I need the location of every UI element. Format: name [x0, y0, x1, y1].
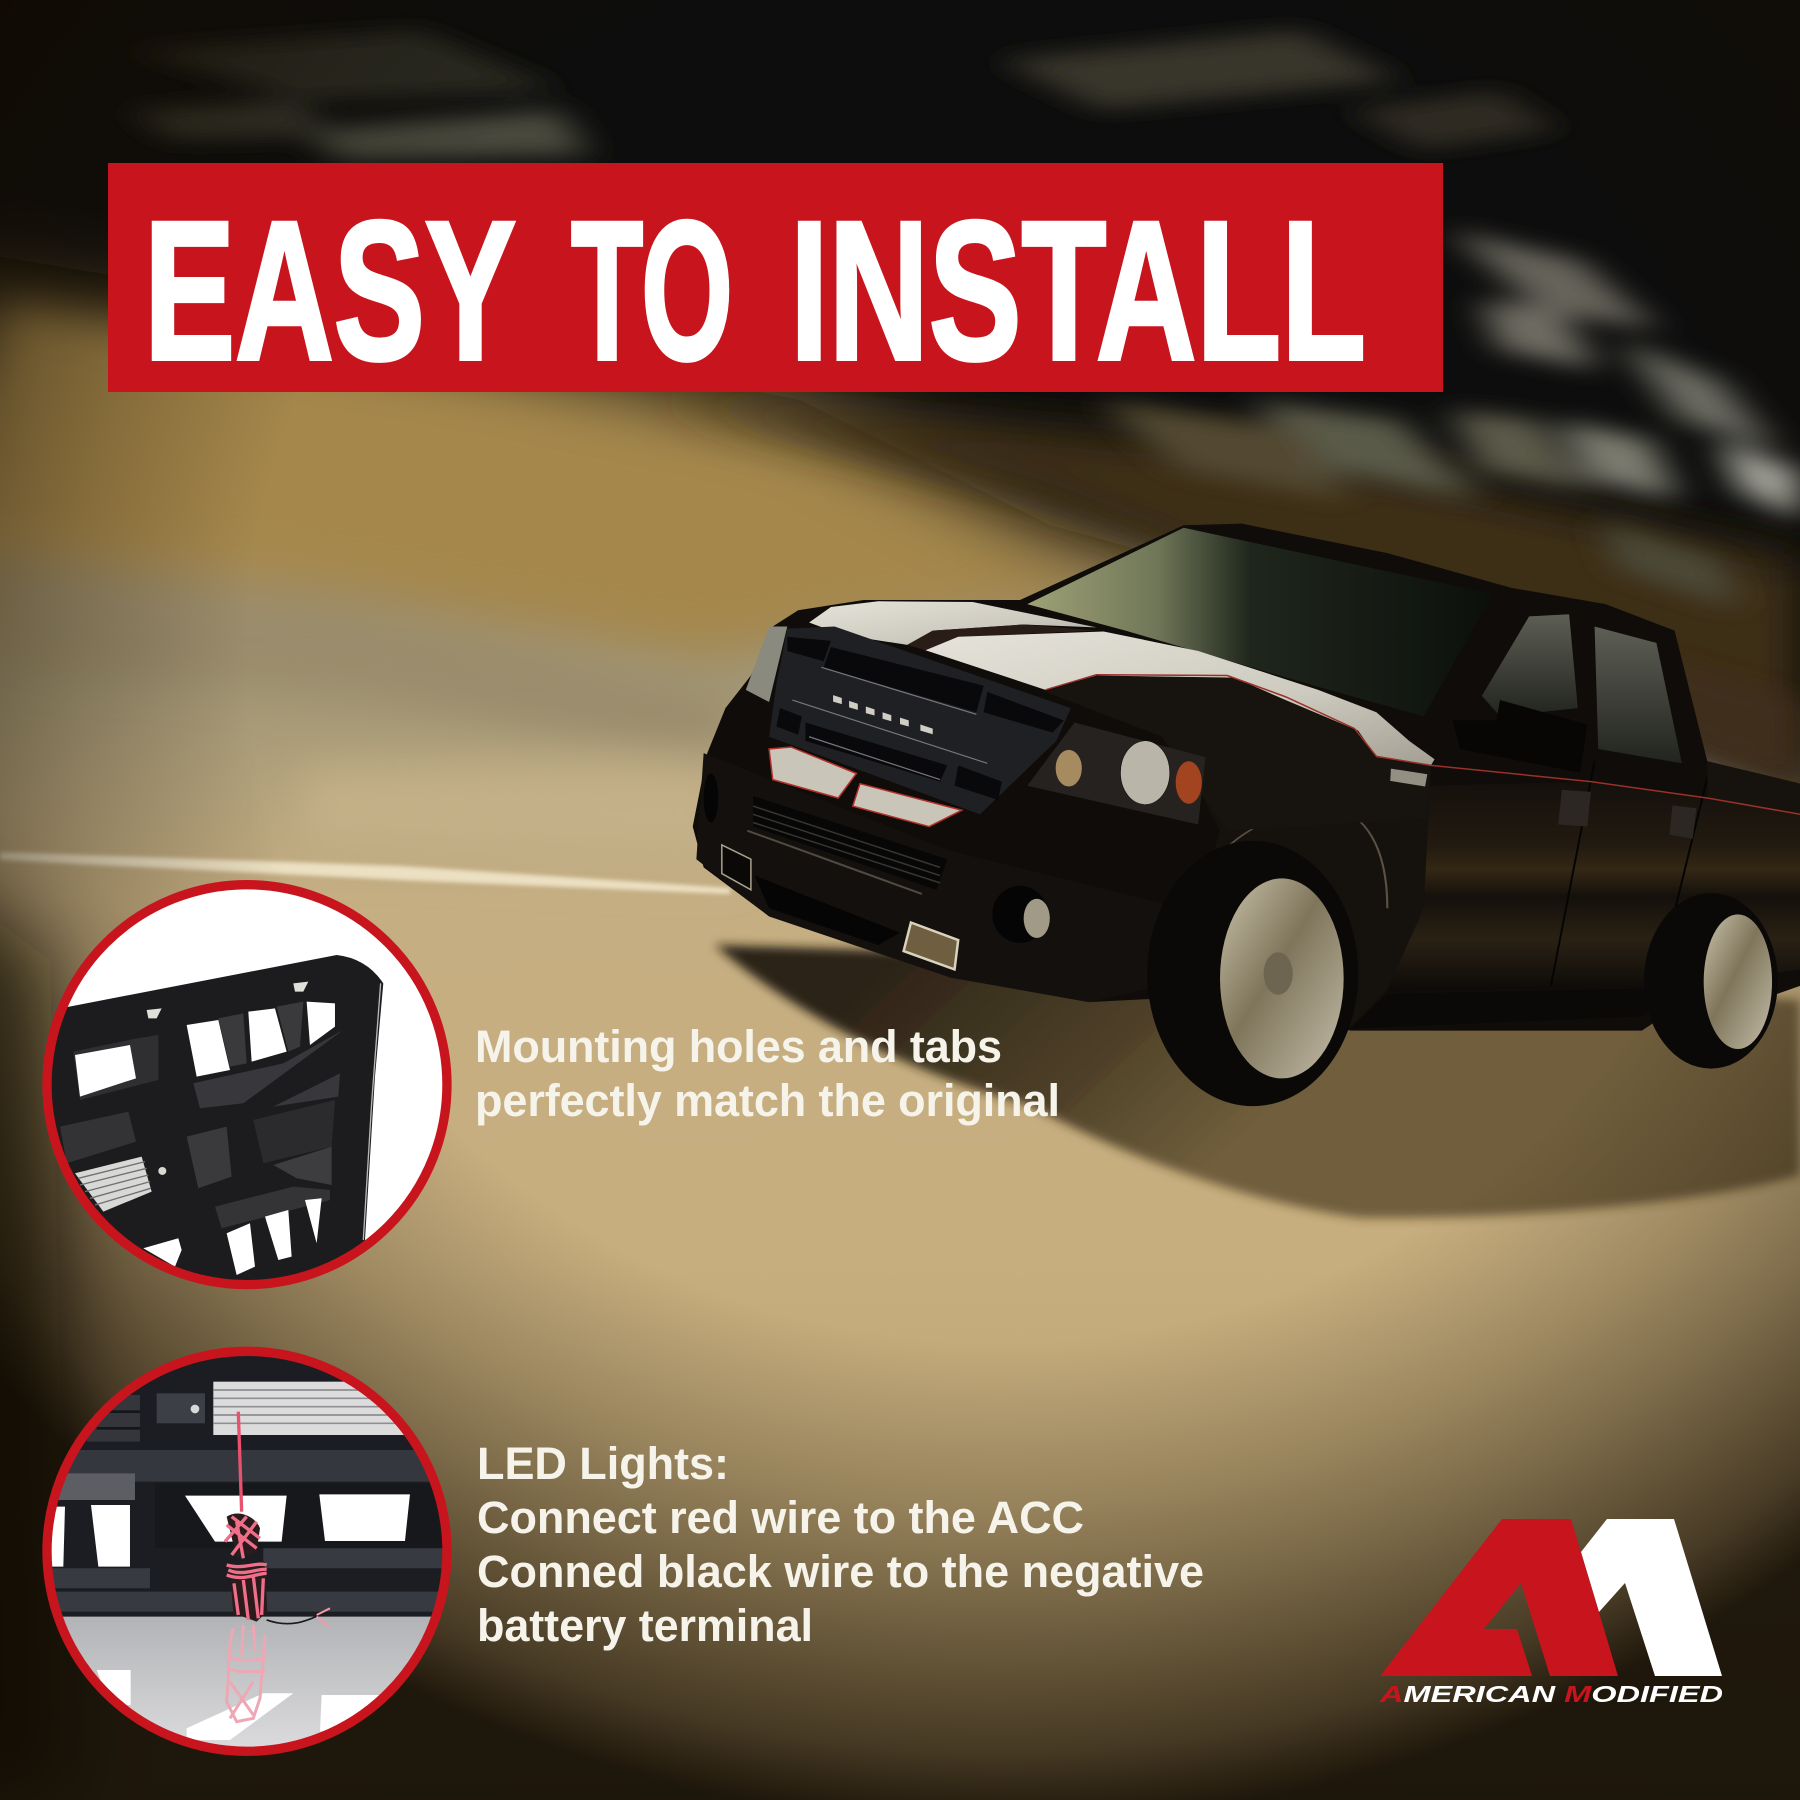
rear bed [1707, 761, 1800, 814]
text block: mounting: perfectly match the original [475, 1075, 1060, 1126]
lower chrome bumper inserts [769, 747, 962, 827]
text block: LED wiring [477, 1438, 1204, 1651]
text block: LED wiring: battery terminal [477, 1600, 813, 1651]
text block: mounting [475, 1021, 1060, 1126]
title text [144, 180, 1366, 401]
tow hook surround [904, 922, 958, 969]
text block: LED wiring: Conned black wire to the negative [477, 1546, 1204, 1597]
louvre [213, 1382, 410, 1435]
truck photo [693, 524, 1800, 1106]
logo: American Modified [1379, 1519, 1723, 1707]
title text: TO [571, 180, 733, 401]
left headlight [746, 627, 787, 702]
title text: EASY [144, 180, 516, 401]
LED light bar [833, 695, 933, 734]
reflective surface [63, 1616, 431, 1747]
front wheel [1147, 841, 1358, 1106]
text block: LED wiring: LED Lights: [477, 1438, 729, 1489]
wire bundle [225, 1412, 330, 1722]
fog lamp [992, 886, 1048, 943]
grille [769, 627, 1071, 814]
circle image: LED wiring [47, 1351, 447, 1751]
badge [1390, 769, 1427, 787]
window openings [50, 1494, 410, 1567]
circle border [47, 885, 447, 1285]
headlight assembly [1027, 722, 1205, 825]
truck body [693, 524, 1800, 1031]
logo mark [1380, 1519, 1722, 1676]
text block: mounting: Mounting holes and tabs [475, 1021, 1002, 1072]
door panels [1380, 782, 1800, 992]
side window: rear [1595, 627, 1682, 763]
windshield [1027, 528, 1493, 716]
circle border [47, 1351, 447, 1751]
side mirror [1453, 700, 1587, 773]
title banner [108, 163, 1443, 401]
title text: INSTALL [790, 180, 1366, 401]
heat sink fins [75, 1157, 152, 1212]
front fender [1169, 733, 1431, 1027]
side window: front [1482, 614, 1578, 716]
hood stripes [809, 601, 1800, 814]
door handles [1558, 790, 1696, 839]
hood dark area [1045, 676, 1431, 831]
front bumper [696, 753, 1198, 1002]
text block: LED wiring: Connect red wire to the ACC [477, 1492, 1084, 1543]
logo wordmark: A MERICAN M ODIFIED [1379, 1681, 1723, 1707]
circle image: grille mounting tabs [43, 885, 447, 1285]
rear wheel [1644, 893, 1778, 1069]
